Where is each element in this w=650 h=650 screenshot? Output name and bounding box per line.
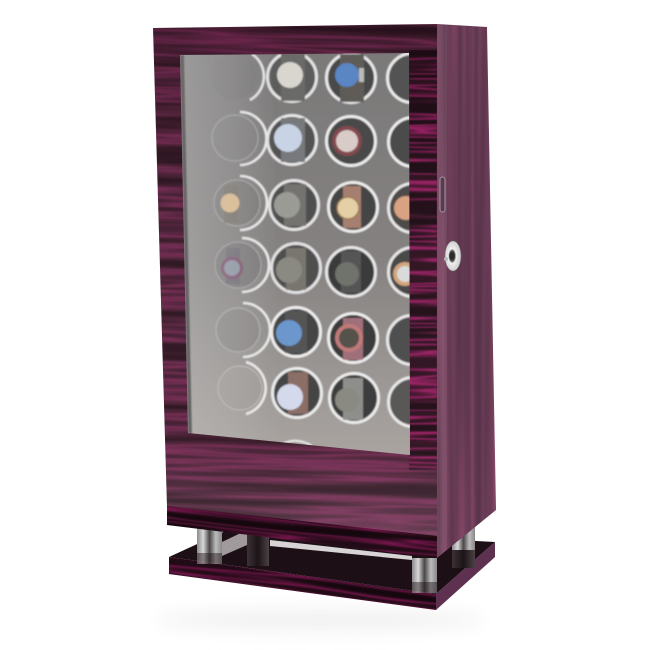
slot r3c2 grey watch [270, 180, 318, 230]
leg: back right [452, 525, 475, 568]
winder row 2 [212, 112, 438, 166]
slot r3c3 gold watch on rose strap [328, 182, 378, 232]
slot r1c1 empty [248, 54, 266, 102]
slot r5c1 empty [216, 303, 270, 357]
base right edge [436, 542, 495, 610]
right frame stripes [409, 50, 437, 470]
base plinth [169, 532, 495, 610]
winder row 5 [216, 303, 436, 364]
winder row 3 [214, 176, 438, 232]
leg: front left [197, 525, 222, 564]
base front edge [169, 557, 436, 610]
side front edge bevel [437, 20, 447, 565]
slot r6c4 empty [388, 378, 438, 426]
slot r4c1 blue and red watch [215, 238, 269, 292]
winder row 4 [215, 238, 438, 296]
lower front dark strip [167, 506, 437, 557]
slot r4c2 grey watch [272, 244, 320, 292]
slot r5c3 rose and dark watch [328, 314, 378, 362]
slot r1c2 silver watch [268, 52, 316, 102]
glass wash over left column [175, 50, 280, 440]
cabinet front panel [153, 24, 437, 536]
slot r2c3 rose watch [326, 116, 376, 166]
slot r6c3 grey watch [330, 374, 378, 422]
row 7 hint at bottom of glass [280, 441, 312, 446]
winder row 1 [248, 53, 410, 105]
slot r6c2 white and rose watch [272, 368, 322, 418]
leg: front right [412, 558, 437, 593]
left glass shadow edge [180, 55, 192, 434]
slot r5c2 blue watch [272, 308, 320, 356]
product photo: watch winder cabinet [153, 24, 496, 628]
winder row 6 [218, 362, 438, 426]
slot r4c4 rose watch [386, 245, 410, 299]
glass pane [175, 50, 414, 460]
glass door [180, 53, 410, 455]
side lock [444, 241, 461, 271]
slot r2c4 empty [386, 115, 410, 169]
side latch slot [440, 177, 445, 212]
slot r5c4 empty [385, 313, 410, 367]
slot r1c4 empty [385, 53, 410, 105]
slot r6c1 empty [218, 362, 266, 414]
floor shadow [155, 610, 485, 630]
base top surface [169, 528, 495, 594]
slot r1c3 blue watch [326, 54, 376, 102]
slot r2c2 pale blue watch [268, 116, 316, 164]
slot r3c1 gold watch [214, 176, 267, 230]
cabinet side [437, 24, 496, 558]
base reflection wedges [222, 530, 247, 556]
leg: back left [247, 530, 269, 566]
slot r3c4 rose-gold watch [386, 181, 410, 235]
slot r4c3 dark watch [326, 248, 376, 296]
slot r2c1 empty [212, 112, 266, 165]
